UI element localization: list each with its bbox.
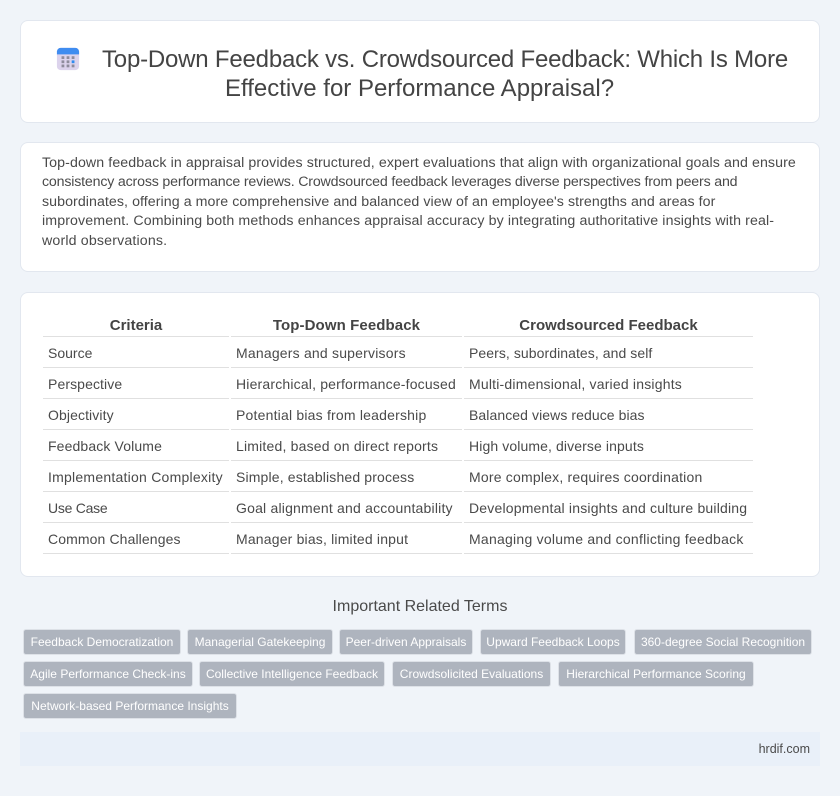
text block: introduction: subordinates, offering a more comprehensive and balanced view of an employee's strengths and areas for bbox=[42, 194, 715, 210]
table header: Crowdsourced Feedback bbox=[519, 317, 698, 334]
text block: introduction: Top-down feedback in appraisal provides structured, expert evaluations that align with organizational goals and ensure bbox=[42, 154, 796, 170]
table row: Implementation Complexity: Simple, established process bbox=[236, 469, 414, 485]
text block: introduction: world observations. bbox=[42, 233, 167, 249]
table row: Source: Source bbox=[48, 345, 92, 361]
tag bbox=[558, 661, 754, 687]
table header: Top-Down Feedback bbox=[273, 317, 420, 334]
table row: Common Challenges: Common Challenges bbox=[48, 531, 181, 547]
heading: important related terms: Important Related Terms bbox=[333, 598, 507, 615]
table row: Feedback Volume: Limited, based on direct reports bbox=[236, 438, 438, 454]
table row: Objectivity: Objectivity bbox=[48, 407, 114, 423]
table row: Perspective: Hierarchical, performance-focused bbox=[236, 376, 456, 392]
tag bbox=[187, 629, 333, 655]
table row: Source bbox=[48, 345, 652, 361]
tag: Crowdsolicited Evaluations bbox=[400, 667, 543, 681]
table row: Use Case: Goal alignment and accountability bbox=[236, 500, 453, 516]
table row: Source: Peers, subordinates, and self bbox=[469, 345, 652, 361]
panel: title card bbox=[20, 20, 820, 123]
tag bbox=[199, 661, 385, 687]
table row: Feedback Volume: Feedback Volume bbox=[48, 438, 162, 454]
table header bbox=[110, 317, 698, 334]
title bbox=[102, 46, 788, 102]
table row: Use Case: Use Case bbox=[48, 500, 107, 516]
icon: calendar bbox=[56, 48, 80, 70]
text block: introduction: consistency across performance reviews. Crowdsourced feedback leverages diverse perspectives from peers and bbox=[42, 174, 737, 190]
tag: Feedback Democratization bbox=[31, 635, 173, 649]
table row: Objectivity: Balanced views reduce bias bbox=[469, 407, 645, 423]
table row: Feedback Volume bbox=[48, 438, 644, 454]
table row: Objectivity bbox=[48, 407, 645, 423]
title: Top-Down Feedback vs. Crowdsourced Feedback: Which Is More bbox=[102, 46, 788, 73]
table row: Use Case bbox=[48, 500, 747, 516]
tag list: related terms bbox=[23, 629, 812, 719]
panel: introduction bbox=[20, 142, 820, 272]
table row: Source: Managers and supervisors bbox=[236, 345, 406, 361]
tag: Hierarchical Performance Scoring bbox=[566, 667, 746, 681]
tag: Agile Performance Check-ins bbox=[30, 667, 186, 681]
tag: Collective Intelligence Feedback bbox=[206, 667, 378, 681]
table row: Common Challenges: Manager bias, limited input bbox=[236, 531, 408, 547]
table row: Perspective: Perspective bbox=[48, 376, 122, 392]
text block: introduction bbox=[42, 154, 796, 249]
panel: comparison table bbox=[20, 292, 820, 577]
tag: 360-degree Social Recognition bbox=[641, 635, 805, 649]
table row: Implementation Complexity: More complex, requires coordination bbox=[469, 469, 702, 485]
table row: Use Case: Developmental insights and culture building bbox=[469, 500, 747, 516]
footer source text: hrdif.com bbox=[759, 742, 810, 756]
tag bbox=[339, 629, 473, 655]
tag: Upward Feedback Loops bbox=[486, 635, 620, 649]
table row: Feedback Volume: High volume, diverse inputs bbox=[469, 438, 644, 454]
table row: Perspective bbox=[48, 376, 682, 392]
table header: Criteria bbox=[110, 317, 162, 334]
footer bar bbox=[20, 732, 820, 766]
table row: Common Challenges bbox=[48, 531, 744, 547]
tag bbox=[480, 629, 626, 655]
tag bbox=[23, 629, 181, 655]
table row: Common Challenges: Managing volume and conflicting feedback bbox=[469, 531, 744, 547]
table row: Implementation Complexity bbox=[48, 469, 702, 485]
tag: Peer-driven Appraisals bbox=[346, 635, 466, 649]
text block: introduction: improvement. Combining both methods enhances appraisal accuracy by integrating authoritative insights with real- bbox=[42, 213, 774, 229]
tag bbox=[392, 661, 551, 687]
table row: Implementation Complexity: Implementation Complexity bbox=[48, 469, 223, 485]
table row: Perspective: Multi-dimensional, varied insights bbox=[469, 376, 682, 392]
tag: Network-based Performance Insights bbox=[31, 699, 229, 713]
tag bbox=[23, 693, 237, 719]
tag bbox=[23, 661, 193, 687]
table row: Objectivity: Potential bias from leadership bbox=[236, 407, 426, 423]
tag bbox=[634, 629, 812, 655]
title: Effective for Performance Appraisal? bbox=[225, 75, 614, 102]
tag: Managerial Gatekeeping bbox=[195, 635, 325, 649]
